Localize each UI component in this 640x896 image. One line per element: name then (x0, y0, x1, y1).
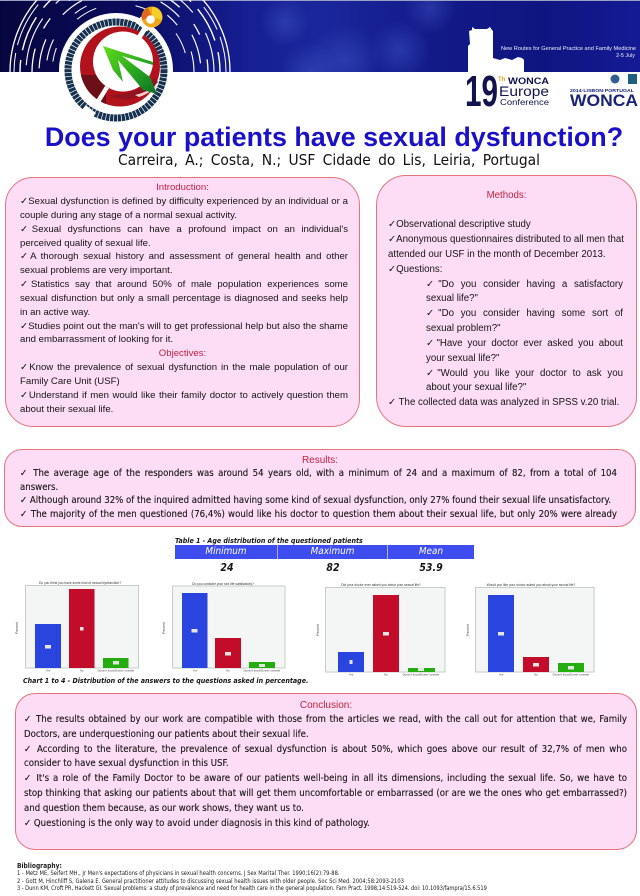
decorative arcs around logo (9, 0, 231, 72)
chart 4: would like doctor to ask: Would you like your doctor asked you about your sexual life? (487, 583, 575, 587)
panel: methods: ✓"Do you consider having some sort of (426, 308, 623, 318)
panel: results: ✓ The majority of the men questioned (76,4%) would like his doctor to question them about their sexual life, but only 20% were already (20, 508, 617, 520)
chart 1: sexual dysfunction: Yes (46, 668, 51, 672)
panel: methods: sexual life?" (426, 292, 478, 304)
panel: conclusion: ✓ According to the literature, the prevalence of sexual dysfunction is about 50%, which goes above our result of 32,7% of men who (24, 744, 627, 754)
panel: methods: ✓Observational descriptive study (388, 218, 531, 230)
panel: methods: ✓"Have your doctor ever asked you about (426, 338, 623, 348)
bibliography: 3 - Dunn KM, Croft PR, Hackett GI. Sexual problems: a study of prevalence and need for health care in the general population. Fam Pract. 1998;14:519-524. doi: 10.1093/fampra/15.6.519 (17, 886, 487, 892)
panel: introduction and objectives: ✓Sexual dysfunction is defined by difficulty experienced by an individual or a (20, 196, 348, 206)
logo: WONCA Lisbon (570, 74, 638, 110)
panel: introduction and objectives: ✓Studies point out the man's will to get professional help but also the shame (20, 320, 348, 332)
panel: introduction and objectives: sexual disfunction but only a small percentage is diagnosed and seeks help (20, 292, 348, 304)
panel: results: ✓ Although around 32% of the inquired admitted having some kind of sexual dysfunction, only 27% found their sexual life unsatisfactory. (20, 494, 611, 506)
bibliography (17, 862, 487, 892)
panel: methods (376, 175, 637, 427)
chart 1: sexual dysfunction (15, 581, 138, 672)
chart caption: Chart 1 to 4 - Distribution of the answers to the questions asked in percentage. (23, 676, 308, 685)
table: age distribution (175, 545, 474, 574)
chart 4: would like doctor to ask: Yes (499, 672, 504, 676)
panel: introduction and objectives: ✓A thorough sexual history and assessment of general health and other (20, 250, 348, 262)
logo: 19th WONCA Europe Conference (465, 67, 549, 116)
chart 2: satisfactory sex life: Doesn't know/Doesn't answer (244, 668, 280, 672)
table: age distribution: Mean (419, 546, 443, 557)
panel: methods: ✓Questions: (388, 264, 442, 274)
panel: methods: about your sexual life?" (426, 382, 526, 392)
chart 1: sexual dysfunction: Percent (15, 622, 19, 634)
panel: conclusion: consider to have sexual dysfunction in this USF. (24, 758, 229, 768)
panel: introduction and objectives: ✓Sexual dysfunctions can have a profound impact on an individual's (20, 224, 348, 234)
logo: 19th WONCA Europe Conference: WONCA (508, 76, 549, 87)
panel: conclusion: stop thinking that asking our patients about that will get them uncomfortable or embarrassed (or are we the ones who get embarrassed?) (24, 788, 627, 798)
chart 1: sexual dysfunction: No (80, 668, 84, 672)
panel: introduction and objectives: perceived quality of sexual life. (20, 238, 151, 248)
panel: introduction and objectives: sexual problems are very important. (20, 264, 172, 276)
conference tagline (501, 46, 636, 59)
bibliography: 1 - Metz ME, Seifert MH., Jr Men's expectations of physicians in sexual health concerns. J Sex Marital Ther. 1990;16(2):79-88. (17, 871, 340, 877)
panel: conclusion: ✓ It's a role of the Family Doctor to be aware of our patients well-being in all its dimensions, including the sexual life. So, we have to (24, 772, 627, 784)
logo: WONCA Lisbon: 2014·LISBON·PORTUGAL (570, 88, 634, 93)
table caption: Table 1 - Age distribution of the questioned patients (175, 536, 363, 545)
panel: results: answers. (20, 482, 58, 492)
chart 1: sexual dysfunction: Doesn't know/Doesn't answer (98, 668, 134, 672)
panel: introduction and objectives: Family Care Unit (USF) (20, 376, 120, 386)
chart 3: doctor ever asked: Did your doctor ever asked you about your sexual life? (341, 583, 421, 587)
heading: results: Results: (302, 454, 338, 466)
logo: 19th WONCA Europe Conference: Conference (500, 97, 549, 107)
panel: methods: attended our USF in the month of December 2013. (388, 248, 606, 260)
chart 4: would like doctor to ask: Doesn't know/Doesn't answer (553, 672, 589, 676)
table: age distribution: 53.9 (419, 562, 443, 574)
panel: introduction and objectives: and embarrassment of looking for it. (20, 334, 173, 344)
panel: methods: ✓Anonymous questionnaires distributed to all men that (388, 234, 624, 244)
conference tagline: New Routes for General Practice and Family Medicine (501, 46, 636, 52)
chart 3: doctor ever asked: No (384, 672, 388, 676)
chart 1: sexual dysfunction: Do you think you have some kind of sexual dysfunction? (39, 581, 121, 585)
authors: Carreira, A.; Costa, N.; USF Cidade do Lis, Leiria, Portugal (118, 151, 540, 169)
tower of Belem silhouette (468, 27, 524, 72)
conference tagline: 2-5 July (616, 53, 635, 59)
chart 4: would like doctor to ask (466, 583, 594, 676)
table: age distribution: 24 (220, 562, 234, 574)
title: Does your patients have sexual dysfunction? (45, 122, 623, 152)
logo: 19th WONCA Europe Conference: 19 (465, 67, 498, 116)
table: age distribution: Maximum (311, 546, 354, 557)
logo: 19th WONCA Europe Conference: Europe (499, 83, 549, 99)
chart 2: satisfactory sex life (162, 582, 285, 672)
panel: results (4, 449, 636, 527)
chart 3: doctor ever asked: Doesn't know/Doesn't answer (403, 672, 439, 676)
panel: methods: your sexual life?" (426, 352, 499, 364)
header banner with logos (0, 0, 640, 122)
panel: introduction and objectives (5, 177, 360, 427)
table: age distribution: Minimum (205, 546, 247, 557)
chart 3: doctor ever asked: Percent (316, 624, 320, 636)
panel: results: ✓ The average age of the responders was around 54 years old, with a minimum of 24 and a maximum of 82, from a total of 104 (20, 468, 617, 478)
bibliography: 2 - Gott M, Hinchliff S, Galena E. General practitioner attitudes to discussing sexual health issues with older people. Soc Sci Med. 2004;58:2093-2103 (17, 878, 404, 884)
panel: introduction and objectives: ✓Understand if men would like their family doctor to actively question them (20, 390, 348, 400)
bibliography: Bibliography: (17, 862, 62, 870)
logo: 19th WONCA Europe Conference: Th (498, 77, 506, 83)
panel: introduction and objectives: about their sexual life. (20, 404, 113, 414)
panel: conclusion: Doctors, are underquestioning our patients about their sexual life. (24, 728, 309, 740)
chart 4: would like doctor to ask: No (534, 672, 538, 676)
panel: conclusion: ✓ The results obtained by our work are compatible with those from the articles we read, with the call out for attention that we, Family (24, 714, 627, 724)
chart 2: satisfactory sex life: Percent (162, 622, 166, 634)
logo: white disc, tick ring, red ring, arrow (59, 6, 173, 127)
panel: methods: ✓"Would you like your doctor to ask you (426, 368, 623, 378)
chart 3: doctor ever asked: Yes (349, 672, 354, 676)
panel: introduction and objectives: ✓Statistics say that around 50% of male population experiences some (20, 278, 348, 290)
panel: methods: ✓"Do you consider having a satisfactory (426, 278, 623, 290)
chart 3: doctor ever asked (316, 583, 445, 676)
heading: objectives: Objectives: (159, 348, 206, 358)
chart 2: satisfactory sex life: No (226, 668, 230, 672)
panel: introduction and objectives: couple during any stage of a normal sexual activity. (20, 210, 237, 220)
panel: introduction and objectives: ✓Know the prevalence of sexual dysfunction in the male population of our (20, 362, 348, 372)
chart 2: satisfactory sex life: Do you consider your sex life satisfactory? (192, 582, 254, 586)
chart 4: would like doctor to ask: Percent (466, 624, 470, 636)
panel: methods: sexual problem?" (426, 322, 501, 334)
panel: conclusion (15, 693, 637, 850)
heading: introduction: Introduction: (156, 182, 209, 192)
table: age distribution: 82 (326, 562, 340, 574)
logo: WONCA Lisbon: WONCA (570, 91, 638, 110)
heading: conclusion: Conclusion: (300, 700, 352, 710)
panel: introduction and objectives: in an active way. (20, 306, 90, 318)
chart 2: satisfactory sex life: Yes (193, 668, 198, 672)
panel: methods: ✓ The collected data was analyzed in SPSS v.20 trial. (388, 396, 619, 408)
bar charts 1 to 4 (15, 581, 594, 676)
heading: methods: Methods: (487, 190, 526, 200)
panel: conclusion: ✓ Questioning is the only way to avoid under diagnosis in this kind of pathology. (24, 818, 370, 828)
panel: conclusion: and question them because, as our work shows, they want us to. (24, 802, 304, 814)
